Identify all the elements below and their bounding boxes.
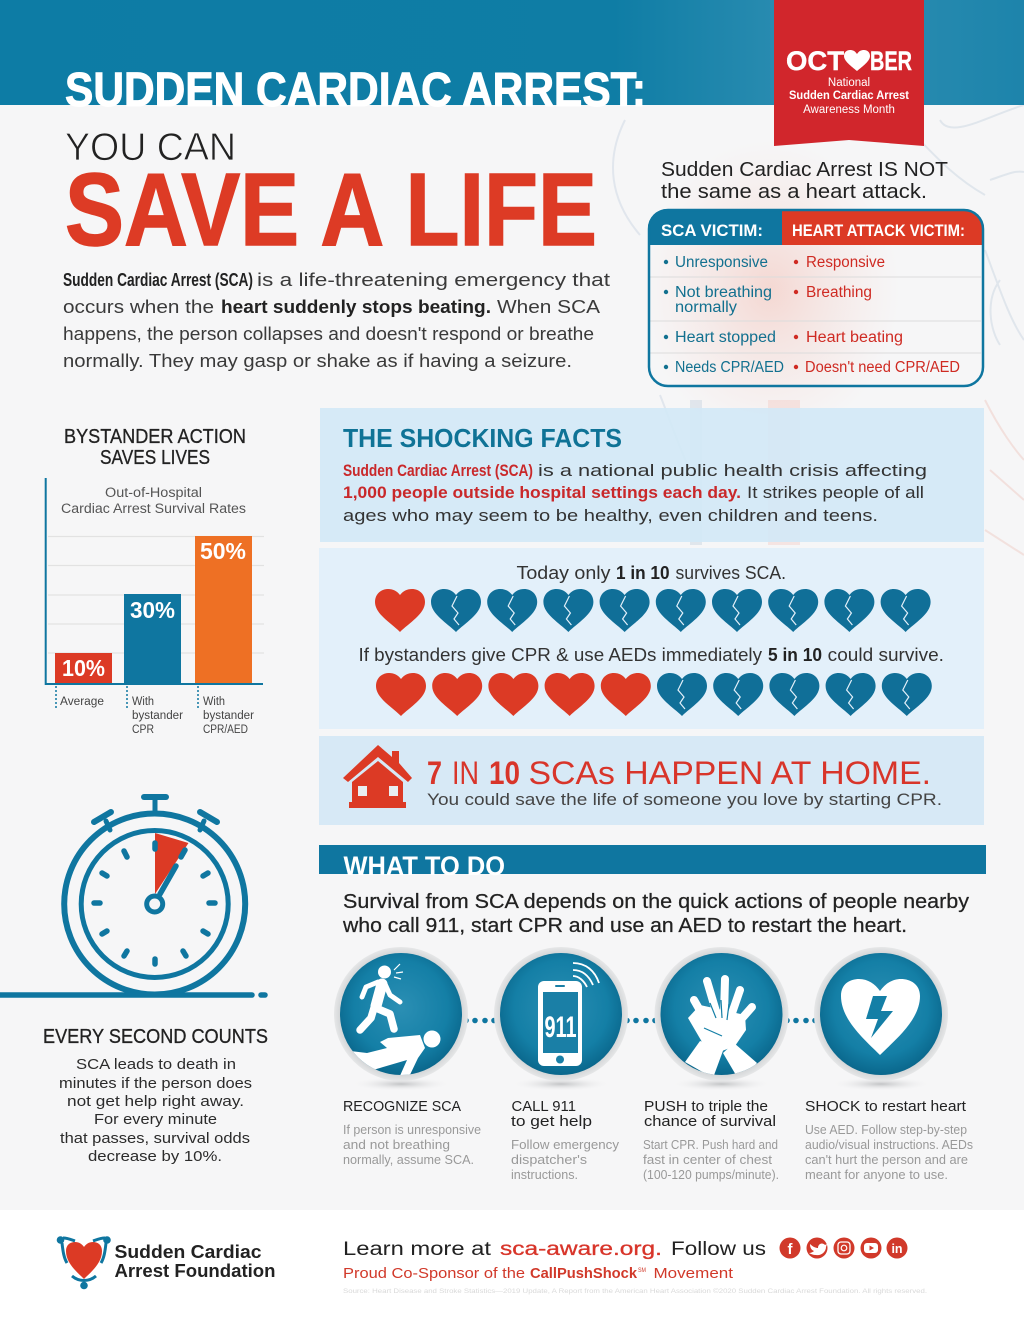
social icons: in <box>891 1242 903 1256</box>
intro paragraph: occurs when the <box>63 296 214 317</box>
text: shocking facts body: 1,000 people outside hospital settings each day. <box>343 483 741 502</box>
icon: shock AED heart <box>814 947 948 1091</box>
heading: the shocking facts: THE SHOCKING FACTS <box>343 423 622 453</box>
step: recognize SCA: RECOGNIZE SCA <box>343 1098 461 1115</box>
step: push: Start CPR. Push hard and <box>643 1138 778 1152</box>
bar chart: survival rates: Out-of-Hospital <box>105 485 202 500</box>
heart attack victim column: Breathing <box>806 284 872 301</box>
text: every second counts: decrease by 10%. <box>88 1148 222 1165</box>
intro paragraph: When SCA <box>497 296 601 317</box>
axis labels: CPR <box>132 724 154 736</box>
intro paragraph: is a life-threatening emergency that <box>257 269 610 290</box>
comparison table: SCA VICTIM: <box>661 221 763 240</box>
text: proud co-sponsor: CallPushShock <box>530 1266 638 1282</box>
heading band: what to do: WHAT TO DO <box>344 851 505 881</box>
step: call 911: instructions. <box>511 1168 578 1182</box>
text: shocking facts body: ages who may seem to be healthy, even children and teens. <box>343 506 878 525</box>
text: learn more: sca-aware.org. <box>500 1239 662 1260</box>
text: survival depends: Survival from SCA depends on the quick actions of people nearby <box>343 891 969 913</box>
heart attack victim column: Doesn't need CPR/AED <box>805 359 960 376</box>
chart heading: BYSTANDER ACTION <box>64 426 246 448</box>
heart attack victim column: Responsive <box>806 254 885 271</box>
axis labels: CPR/AED <box>203 724 248 736</box>
SCA victim column: Heart stopped <box>675 329 776 346</box>
ribbon: October awareness month: BER <box>870 46 912 76</box>
intro paragraph: happens, the person collapses and doesn't respond or breathe <box>63 323 594 344</box>
text: if bystanders give CPR: could survive. <box>828 645 944 665</box>
logo: Sudden Cardiac Arrest Foundation: Sudden Cardiac <box>114 1242 262 1262</box>
social icons <box>780 1238 908 1258</box>
icon: stopwatch <box>0 797 265 995</box>
ribbon: October awareness month: National <box>828 77 870 89</box>
heading band: what to do <box>319 845 986 881</box>
text: today only 1 in 10: survives SCA. <box>676 563 786 583</box>
text: learn more: Follow us <box>671 1239 766 1260</box>
step: call 911 <box>511 1098 620 1182</box>
hearts row: 5 in 10 <box>376 673 932 716</box>
text: every second counts <box>59 1056 252 1165</box>
ribbon: October awareness month: OCT <box>786 46 845 76</box>
icon: push hands <box>654 947 788 1091</box>
logo: Sudden Cardiac Arrest Foundation: Arrest Foundation <box>114 1261 276 1281</box>
panel: happens at home <box>319 736 984 825</box>
intro paragraph <box>63 269 610 371</box>
step: recognize SCA: normally, assume SCA. <box>343 1153 474 1167</box>
text: proud co-sponsor: SM <box>638 1268 646 1274</box>
ribbon: October awareness month <box>774 0 924 146</box>
SCA victim column <box>664 254 784 376</box>
step: call 911: dispatcher's <box>511 1153 587 1167</box>
text: shocking facts body: It strikes people of all <box>747 483 924 502</box>
panel: survival hearts <box>319 548 984 729</box>
text: every second counts: For every minute <box>94 1111 217 1128</box>
icon: call 911 phone: 911 <box>544 1011 576 1044</box>
axis labels: With <box>132 696 154 708</box>
bar chart: survival rates <box>45 478 264 736</box>
hearts row: 1 in 10 <box>375 589 931 632</box>
text: today only 1 in 10 <box>516 563 786 583</box>
callout: SCA is not a heart attack: the same as a heart attack. <box>661 181 927 203</box>
text: learn more <box>343 1239 766 1260</box>
step: recognize SCA: and not breathing <box>343 1138 450 1152</box>
step: call 911: CALL 911 <box>512 1098 576 1115</box>
SCA victim column: Unresponsive <box>675 254 768 271</box>
header band <box>0 0 1024 105</box>
text: shocking facts body <box>343 461 927 525</box>
step: shock: can't hurt the person and are <box>805 1153 968 1167</box>
bar: with bystander CPR 30%: 30% <box>130 597 175 623</box>
text: if bystanders give CPR <box>358 645 944 665</box>
text: 7 in 10 SCAs happen at home: 7 <box>427 755 442 791</box>
step: shock: SHOCK to restart heart <box>805 1098 967 1115</box>
step: push: PUSH to triple the <box>644 1098 768 1115</box>
ribbon: October awareness month: Sudden Cardiac Arrest <box>789 90 909 102</box>
background heart illustration <box>613 105 1024 555</box>
logo: Sudden Cardiac Arrest Foundation <box>57 1236 276 1289</box>
source line: Source: Heart Disease and Stroke Statistics—2019 Update, A Report from the American Heart Association ©2020 Sudden Cardiac Arrest Foundation. All rights reserved. <box>343 1287 927 1295</box>
text: shocking facts body: is a national public health crisis affecting <box>538 461 927 480</box>
text: if bystanders give CPR: If bystanders give CPR & use AEDs immediately <box>358 645 762 665</box>
heart attack victim column: Heart beating <box>806 329 903 346</box>
text: 7 in 10 SCAs happen at home: SCAs HAPPEN AT HOME. <box>528 755 931 791</box>
step: recognize SCA: If person is unresponsive <box>343 1123 481 1137</box>
subtitle: You can: YOU CAN <box>65 126 236 169</box>
step: shock: meant for anyone to use. <box>805 1168 948 1182</box>
social icons: f <box>788 1241 794 1258</box>
bar: with bystander CPR/AED 50% <box>195 536 252 683</box>
footer band <box>0 1210 1024 1325</box>
step: shock: audio/visual instructions. AEDs <box>805 1138 973 1152</box>
icon: recognize SCA <box>334 947 468 1091</box>
intro paragraph: heart suddenly stops beating. <box>221 296 491 317</box>
step: shock <box>805 1098 973 1182</box>
text: learn more: Learn more at <box>343 1239 492 1260</box>
text: survival depends: who call 911, start CPR and use an AED to restart the heart. <box>342 915 907 937</box>
text: 7 in 10 SCAs happen at home: 10 <box>489 755 520 791</box>
SCA victim column: Needs CPR/AED <box>675 359 784 376</box>
ribbon: October awareness month: Awareness Month <box>803 104 895 116</box>
connector dots <box>463 1018 818 1023</box>
text: today only 1 in 10: 1 in 10 <box>616 563 670 583</box>
heart attack victim column <box>794 254 960 376</box>
intro paragraph: normally. They may gasp or shake as if having a seizure. <box>63 350 572 371</box>
comparison table: HEART ATTACK VICTIM: <box>792 221 965 240</box>
title line: Sudden Cardiac Arrest: SUDDEN CARDIAC ARREST: <box>65 64 646 117</box>
step: call 911: to get help <box>511 1113 592 1130</box>
axis labels: bystander <box>132 710 183 722</box>
text: today only 1 in 10: Today only <box>516 563 610 583</box>
chart heading <box>64 426 246 469</box>
step: push: fast in center of chest <box>643 1153 773 1167</box>
step: push <box>643 1098 779 1182</box>
SCA victim column: normally <box>675 299 737 316</box>
chart heading: SAVES LIVES <box>100 447 210 469</box>
bar chart: survival rates: Cardiac Arrest Survival Rates <box>61 501 246 516</box>
axis labels: bystander <box>203 710 254 722</box>
text: every second counts: that passes, survival odds <box>60 1130 250 1147</box>
text: shocking facts body: Sudden Cardiac Arrest (SCA) <box>343 461 533 480</box>
axis labels <box>56 686 254 736</box>
bar: with bystander CPR 30% <box>124 594 181 683</box>
axis labels: Average <box>60 696 104 708</box>
headline: Save a life: SAVE A LIFE <box>65 152 597 267</box>
text: every second counts: SCA leads to death in <box>76 1056 236 1073</box>
icon: call 911 phone <box>494 947 628 1091</box>
bar: with bystander CPR/AED 50%: 50% <box>200 538 246 564</box>
text: proud co-sponsor: Proud Co-Sponsor of the <box>343 1266 525 1282</box>
text: you could save the life: You could save the life of someone you love by starting CPR. <box>427 790 942 809</box>
comparison table <box>648 209 983 386</box>
callout: SCA is not a heart attack <box>661 159 948 203</box>
step: push: chance of survival <box>644 1113 776 1130</box>
text: if bystanders give CPR: 5 in 10 <box>768 645 822 665</box>
bar: average 10%: 10% <box>62 655 105 681</box>
step: call 911: Follow emergency <box>511 1138 620 1152</box>
axis labels: With <box>203 696 225 708</box>
SCA victim column: Not breathing <box>675 284 772 301</box>
text: 7 in 10 SCAs happen at home: IN <box>452 755 479 791</box>
text: proud co-sponsor: Movement <box>654 1266 733 1282</box>
panel: the shocking facts <box>320 408 984 542</box>
callout: SCA is not a heart attack: Sudden Cardiac Arrest IS NOT <box>661 159 948 181</box>
step: push: (100-120 pumps/minute). <box>643 1168 779 1182</box>
heading: every second counts: EVERY SECOND COUNTS <box>43 1026 268 1048</box>
step: shock: Use AED. Follow step-by-step <box>805 1123 967 1137</box>
intro paragraph: Sudden Cardiac Arrest (SCA) <box>63 269 253 290</box>
icon: house <box>343 745 412 808</box>
text: survival depends <box>342 891 969 937</box>
text: proud co-sponsor <box>343 1266 733 1282</box>
text: every second counts: not get help right away. <box>67 1093 244 1110</box>
text: every second counts: minutes if the person does <box>59 1075 252 1092</box>
step: recognize SCA <box>343 1098 481 1167</box>
